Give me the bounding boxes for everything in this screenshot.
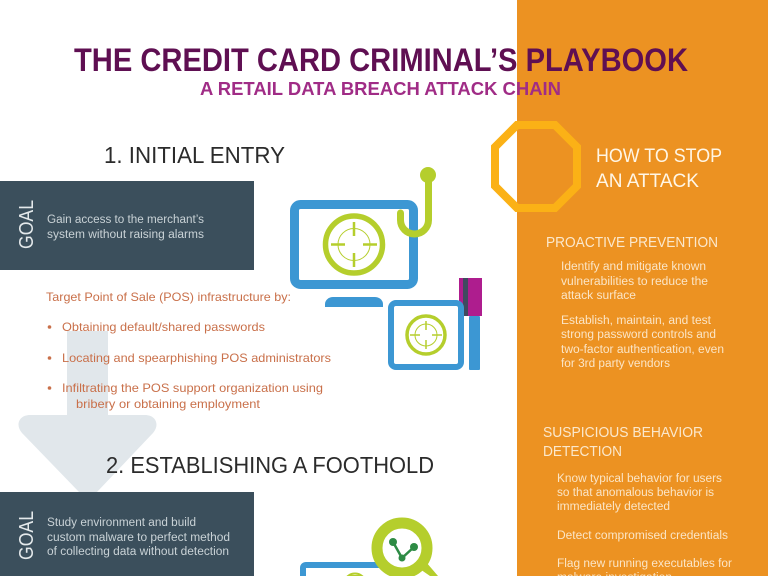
heading: suspicious behavior detection: DETECTION bbox=[543, 444, 622, 460]
text block: proactive prevention items: for 3rd party vendors bbox=[561, 358, 670, 370]
icon: monitor with target and hook bbox=[294, 167, 436, 307]
panel: goal 1 bbox=[0, 181, 254, 270]
goal 1 text: Gain access to the merchant’s bbox=[47, 214, 204, 226]
text block: proactive prevention items: Identify and mitigate known bbox=[561, 261, 706, 273]
heading: step 1: 1. INITIAL ENTRY bbox=[104, 142, 285, 168]
hook bbox=[400, 167, 436, 234]
text block: target POS list: Infiltrating the POS support organization using bbox=[62, 381, 323, 395]
icon: card terminal with target bbox=[391, 278, 482, 370]
label: goal: GOAL bbox=[15, 200, 38, 249]
panel: how to stop an attack background bbox=[517, 0, 768, 576]
text block: proactive prevention items: two-factor authentication, even bbox=[561, 344, 724, 356]
network nodes bbox=[389, 538, 418, 562]
icon: monitor with magnifying glass bbox=[300, 523, 438, 576]
arrow: down arrow between steps bbox=[19, 331, 156, 492]
goal 2 text: custom malware to perfect method bbox=[47, 532, 230, 544]
text block: proactive prevention items: vulnerabilities to reduce the bbox=[561, 276, 708, 288]
goal 2 text: Study environment and build bbox=[47, 517, 196, 529]
label: goal: GOAL bbox=[15, 511, 38, 560]
target bbox=[326, 216, 382, 273]
text block: target POS list: Locating and spearphishing POS administrators bbox=[62, 351, 331, 365]
text block: proactive prevention items: attack surface bbox=[561, 290, 636, 302]
subtitle: A RETAIL DATA BREACH ATTACK CHAIN bbox=[200, 79, 561, 99]
small target bbox=[407, 316, 445, 354]
title bbox=[74, 42, 688, 99]
goal 1 text bbox=[47, 214, 204, 241]
text block: proactive prevention items bbox=[561, 261, 724, 370]
goal 1 text: system without raising alarms bbox=[47, 229, 204, 241]
title: THE CREDIT CARD CRIMINAL’S PLAYBOOK bbox=[74, 42, 688, 78]
text block: suspicious behavior items bbox=[557, 473, 732, 576]
text block: target POS list: bribery or obtaining employment bbox=[76, 397, 261, 411]
goal 2 text bbox=[47, 517, 230, 558]
text block: target POS list bbox=[46, 290, 331, 411]
text block: suspicious behavior items: Flag new running executables for bbox=[557, 558, 732, 570]
heading: proactive prevention: PROACTIVE PREVENTION bbox=[546, 235, 718, 251]
text block: target POS list: Obtaining default/shared passwords bbox=[62, 320, 265, 334]
text block: proactive prevention items: Establish, maintain, and test bbox=[561, 315, 712, 327]
text block: suspicious behavior items: Know typical behavior for users bbox=[557, 473, 722, 485]
text block: suspicious behavior items: Detect compromised credentials bbox=[557, 530, 728, 542]
heading: how to stop an attack bbox=[596, 145, 722, 192]
heading: suspicious behavior detection bbox=[543, 425, 703, 460]
text block: suspicious behavior items: immediately detected bbox=[557, 501, 670, 513]
goal 2 text: of collecting data without detection bbox=[47, 546, 229, 558]
heading: how to stop an attack: HOW TO STOP bbox=[596, 145, 722, 167]
heading: step 2: 2. ESTABLISHING A FOOTHOLD bbox=[106, 452, 434, 478]
panel: goal 2 bbox=[0, 492, 254, 576]
icon: stop octagon bbox=[495, 125, 577, 208]
text block: target POS list: Target Point of Sale (POS) infrastructure by: bbox=[46, 290, 291, 304]
heading: how to stop an attack: AN ATTACK bbox=[596, 170, 699, 192]
text block: proactive prevention items: strong password controls and bbox=[561, 329, 716, 341]
heading: suspicious behavior detection: SUSPICIOUS BEHAVIOR bbox=[543, 425, 703, 441]
text block: suspicious behavior items: so that anomalous behavior is bbox=[557, 487, 714, 499]
